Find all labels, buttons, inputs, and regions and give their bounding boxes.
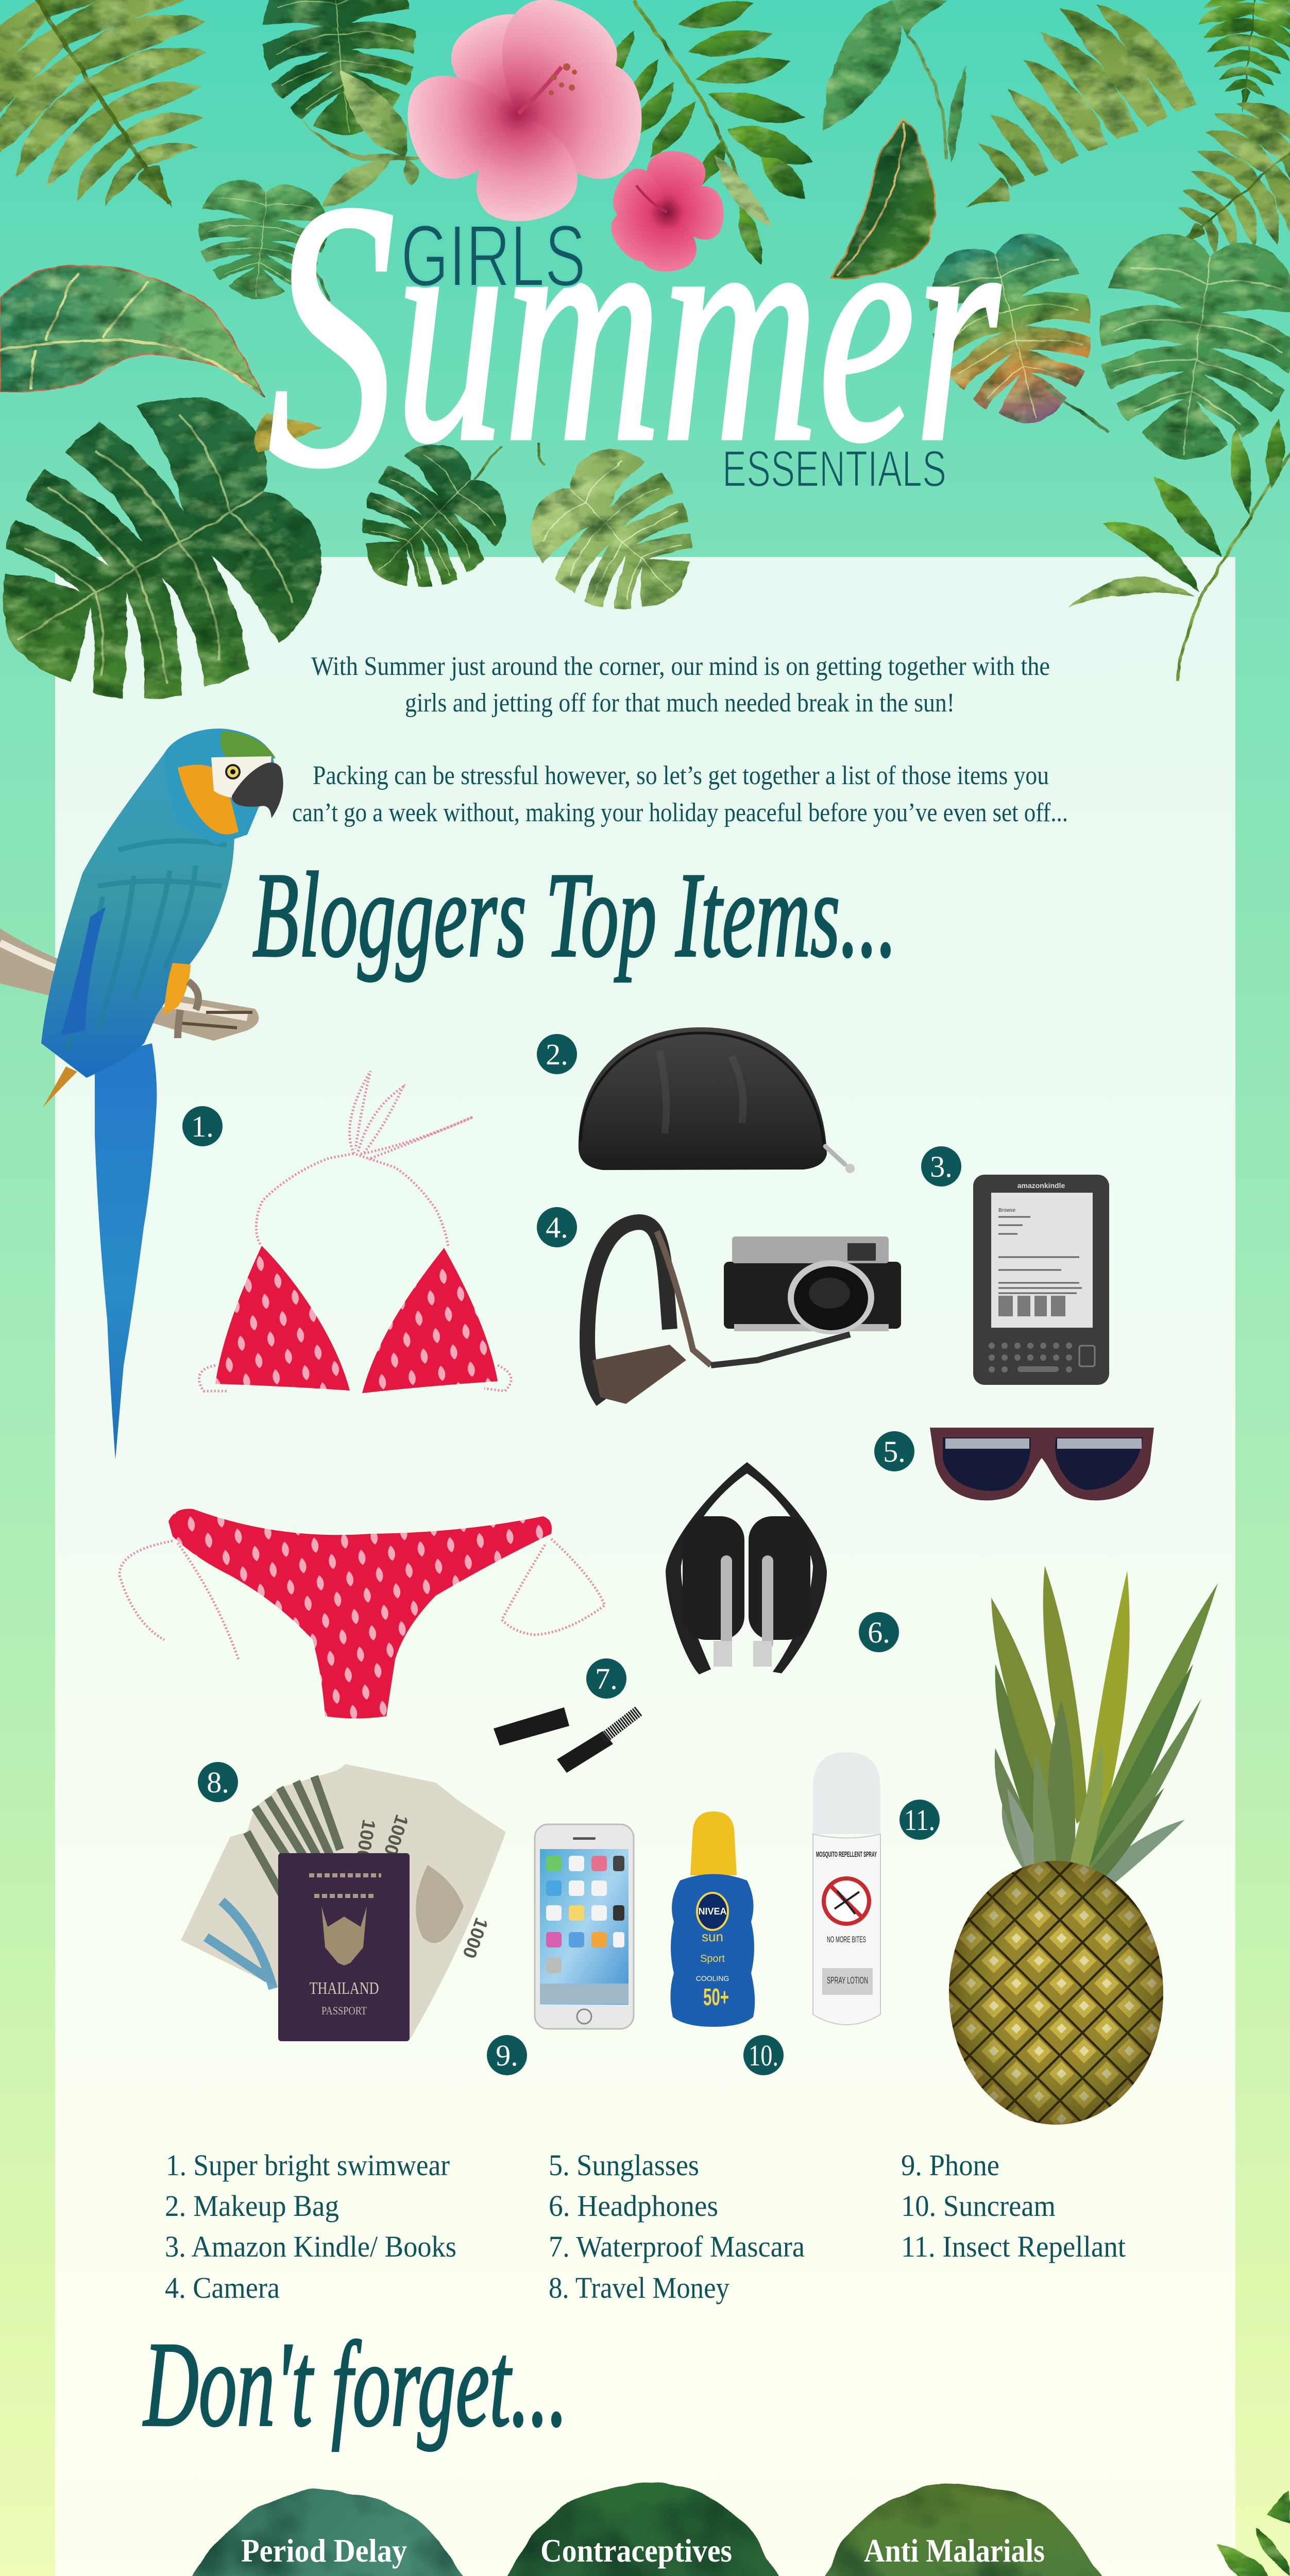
flower: small red hibiscus xyxy=(603,147,724,274)
item 6: headphones xyxy=(666,1462,827,1674)
item 10: suncream: COOLING xyxy=(696,1974,729,1982)
yellow belly xyxy=(164,963,191,1015)
leaf: dark corner frond xyxy=(1189,0,1290,118)
item 4: camera with strap xyxy=(587,1222,901,1404)
heading: Bloggers Top Items: Bloggers Top Items... xyxy=(252,848,897,982)
panel: period delay: Period Delay xyxy=(241,2532,407,2569)
item 8: passport and money: 1000 xyxy=(459,1915,493,1961)
bottom tropical leaves xyxy=(0,2491,1290,2576)
item 10: suncream: sun xyxy=(702,1929,723,1944)
flower: large pink hibiscus xyxy=(398,0,643,229)
title word: Essentials: ESSENTIALS xyxy=(722,440,946,497)
item 8: passport and money: THAILAND xyxy=(309,1979,379,1998)
badge 6 xyxy=(859,1612,899,1652)
item 3: kindle: amazonkindle xyxy=(1017,1181,1065,1190)
badge 1: 1. xyxy=(191,1110,214,1143)
beak xyxy=(232,762,283,818)
item 11: insect repellent: MOSQUITO REPELLENT SPRAY xyxy=(816,1850,877,1859)
illustration: macaw parrot on branch xyxy=(0,728,283,1460)
item 10: suncream: 50+ xyxy=(703,1984,729,2010)
title xyxy=(268,124,1003,546)
panel: contraceptives: Contraceptives xyxy=(540,2532,732,2569)
leaf: top centre leaf xyxy=(823,0,966,164)
heading: Don't forget: Don't forget... xyxy=(143,2317,568,2452)
perch branch xyxy=(0,928,259,1041)
feet xyxy=(178,981,198,1038)
title word: Summer: S xyxy=(268,124,396,546)
leaf: light corner frond xyxy=(1126,68,1290,309)
list column three: 10. Suncream xyxy=(901,2189,1056,2223)
list column two: 5. Sunglasses xyxy=(549,2148,699,2182)
intro text: girls and jetting off for that much needed break in the sun! xyxy=(405,688,955,718)
badge 2 xyxy=(537,1034,577,1074)
item 8: passport and money: 1000 xyxy=(380,1812,413,1858)
item 8: passport and money: 1000 xyxy=(352,1818,380,1862)
badge 11: 11. xyxy=(904,1803,935,1837)
pineapple body xyxy=(949,1861,1163,2125)
badge 9: 9. xyxy=(496,2039,518,2072)
leaf: palm frond top left xyxy=(0,0,295,288)
badge 10 xyxy=(743,2035,784,2075)
number badges xyxy=(182,1034,961,2075)
tail xyxy=(95,1043,157,1460)
leaf: dark branch behind flower xyxy=(612,0,812,264)
list column one: 1. Super bright swimwear xyxy=(166,2148,450,2182)
panel: anti malarials xyxy=(811,2482,1113,2576)
list column two: 6. Headphones xyxy=(549,2189,718,2223)
numbered product items xyxy=(120,1027,1154,2041)
item 10: suncream xyxy=(670,1811,755,2027)
list column two xyxy=(549,2148,805,2304)
content panel xyxy=(55,557,1235,2576)
banknote fan xyxy=(181,1764,506,2040)
item 8: passport and money: PASSPORT xyxy=(321,2004,367,2017)
panel: period delay xyxy=(177,2491,478,2576)
leaf: monstera top xyxy=(254,0,426,144)
leaf: coloured monstera xyxy=(914,223,1114,442)
badge 4 xyxy=(537,1207,577,1247)
badge 4: 4. xyxy=(546,1211,568,1244)
panel: anti malarials: Anti Malarials xyxy=(864,2532,1045,2569)
list column three: 9. Phone xyxy=(901,2148,999,2182)
badge 3: 3. xyxy=(930,1150,953,1183)
leaf: light monstera xyxy=(509,428,728,647)
leaf: small dark monstera xyxy=(329,425,525,621)
item 9: phone xyxy=(535,1824,634,2029)
list column three: 11. Insect Repellant xyxy=(901,2230,1126,2263)
title word: Summer: ummer xyxy=(396,148,1003,508)
leaf: hanging branch right xyxy=(1070,418,1290,681)
badge 1 xyxy=(182,1106,223,1146)
passport xyxy=(278,1853,410,2041)
badge 9 xyxy=(487,2035,527,2075)
item 10: suncream: NIVEA xyxy=(698,1906,727,1917)
item 1b: bikini bottom xyxy=(120,1509,605,1719)
badge 7 xyxy=(586,1658,626,1699)
intro text xyxy=(292,652,1068,827)
leaf: right side sprig xyxy=(1158,2491,1290,2576)
list column one: 3. Amazon Kindle/ Books xyxy=(165,2230,456,2263)
leaf: fern top right xyxy=(907,0,1201,218)
leaf: light sprig near flower xyxy=(300,71,432,207)
badge 3 xyxy=(921,1146,961,1187)
leaf: large monstera bottom left xyxy=(0,356,359,766)
badge 6: 6. xyxy=(868,1616,890,1649)
item 8: passport and money xyxy=(181,1764,506,2041)
leaf: small monstera left xyxy=(191,176,332,307)
item 2: makeup bag xyxy=(579,1027,855,1173)
title word: Girls: GIRLS xyxy=(401,207,586,305)
list column two: 8. Travel Money xyxy=(549,2271,729,2304)
badge 2: 2. xyxy=(546,1038,568,1071)
list column two: 7. Waterproof Mascara xyxy=(549,2230,805,2263)
item 3: kindle: Browse xyxy=(998,1208,1016,1213)
item 5: sunglasses xyxy=(930,1428,1154,1500)
list column one: 4. Camera xyxy=(165,2271,280,2304)
head xyxy=(164,728,274,845)
intro text: Packing can be stressful however, so let’s get together a list of those items you xyxy=(313,761,1049,790)
badge 5: 5. xyxy=(883,1435,906,1468)
leaf: croton left xyxy=(0,266,265,398)
list column one: 2. Makeup Bag xyxy=(165,2189,339,2223)
item 10: suncream: Sport xyxy=(700,1953,725,1964)
badge 10: 10. xyxy=(749,2039,778,2072)
top tropical leaves xyxy=(0,0,1290,766)
item 11: insect repellent: SPRAY LOTION xyxy=(827,1975,868,1986)
item 11: insect repellent xyxy=(813,1752,880,2025)
item 11: insect repellent: NO MORE BITES xyxy=(827,1935,866,1944)
item list xyxy=(165,2148,1126,2304)
panel: contraceptives xyxy=(495,2482,792,2576)
list column three xyxy=(901,2148,1126,2263)
badge 7: 7. xyxy=(595,1662,618,1696)
item 7: mascara xyxy=(494,1707,639,1773)
intro text: can’t go a week without, making your holiday peaceful before you’ve even set off... xyxy=(292,798,1068,827)
leaf: big monstera right xyxy=(1082,226,1290,472)
item 1: bikini top xyxy=(199,1071,511,1393)
intro text: With Summer just around the corner, our mind is on getting together with the xyxy=(311,652,1050,681)
list column one xyxy=(165,2148,456,2304)
badge 5 xyxy=(874,1431,914,1471)
body xyxy=(41,747,234,1078)
badge 8 xyxy=(198,1762,238,1802)
badge 8: 8. xyxy=(207,1766,229,1799)
leaf: croton leaf with orange edge xyxy=(831,120,935,278)
pineapple crown xyxy=(991,1566,1218,1901)
item 3: kindle xyxy=(973,1175,1109,1385)
illustration: pineapple xyxy=(949,1566,1218,2125)
